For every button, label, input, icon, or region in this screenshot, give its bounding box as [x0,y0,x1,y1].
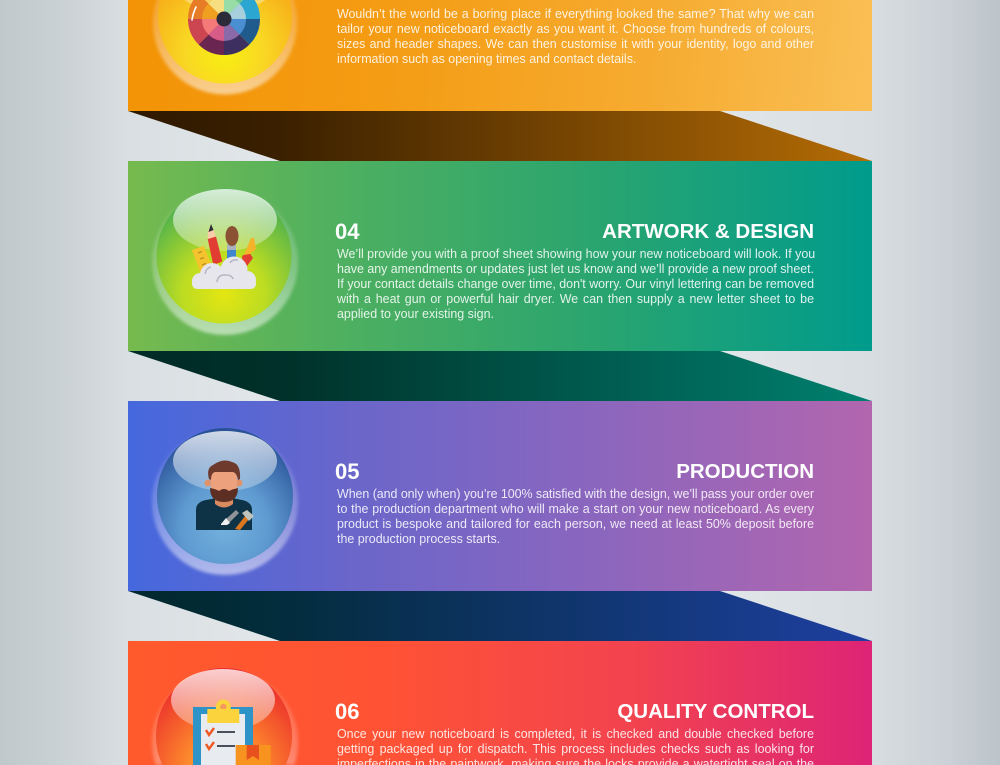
body text: artwork: If your contact details change over time, don't worry. Our vinyl lettering can be removed [337,277,814,291]
body text: customisation: Wouldn’t the world be a boring place if everything looked the same? That why we can [337,7,814,21]
body text: quality control [337,727,814,765]
icon: clipboard checklist globe [150,668,300,765]
body text: artwork [337,247,815,321]
body text: customisation: tailor your new noticeboard exactly as you want it. Choose from hundreds of colours, [337,22,814,36]
step number 05: 05 [335,459,359,484]
body text: quality control: getting packaged up for dispatch. This process includes checks such as looking for [337,742,814,756]
panel: 06 quality control [128,641,872,765]
body text: production: to the production department who will make a start on your new noticeboard. As every [337,502,814,516]
ribbon shadow: below panel 04 [128,351,872,401]
body text: customisation [337,7,814,66]
body text: production: product is bespoke and tailored for each person, we need at least 50% deposit before [337,517,814,531]
heading: artwork and design: ARTWORK & DESIGN [602,220,814,243]
panel: 04 artwork and design [128,161,872,351]
body text: customisation: sizes and header shapes. We can then customise it with your identity, logo and other [337,37,814,51]
ribbon shadow: below panel 03 [128,111,872,161]
body text: artwork: have any amendments or updates just let us know and we’ll provide a new proof sheet. [337,262,814,276]
icon: craftsman globe [150,428,299,577]
body text: production [337,487,814,546]
panel: 03 customisation [128,0,872,111]
body text: quality control: Once your new noticeboard is completed, it is checked and double checked before [337,727,814,741]
ribbon shadow: below panel 05 [128,591,872,641]
body text: customisation: information such as opening times and contact details. [337,52,636,66]
heading: production: PRODUCTION [676,460,814,483]
body text: production: When (and only when) you’re 100% satisfied with the design, we’ll pass your order over [337,487,814,501]
step number 06: 06 [335,699,359,724]
heading: quality control: QUALITY CONTROL [617,700,814,723]
step number 04: 04 [335,219,359,244]
body text: artwork: applied to your existing sign. [337,307,494,321]
panel: 05 production [128,401,872,591]
icon: art supplies globe [150,188,300,337]
body text: production: the production process starts. [337,532,500,546]
body text: artwork: We’ll provide you with a proof sheet showing how your new noticeboard will look. If you [337,247,815,261]
icon: colour wheel globe [152,0,298,97]
body text: artwork: with a heat gun or powerful hair dryer. We can then supply a new letter sheet to be [337,292,814,306]
